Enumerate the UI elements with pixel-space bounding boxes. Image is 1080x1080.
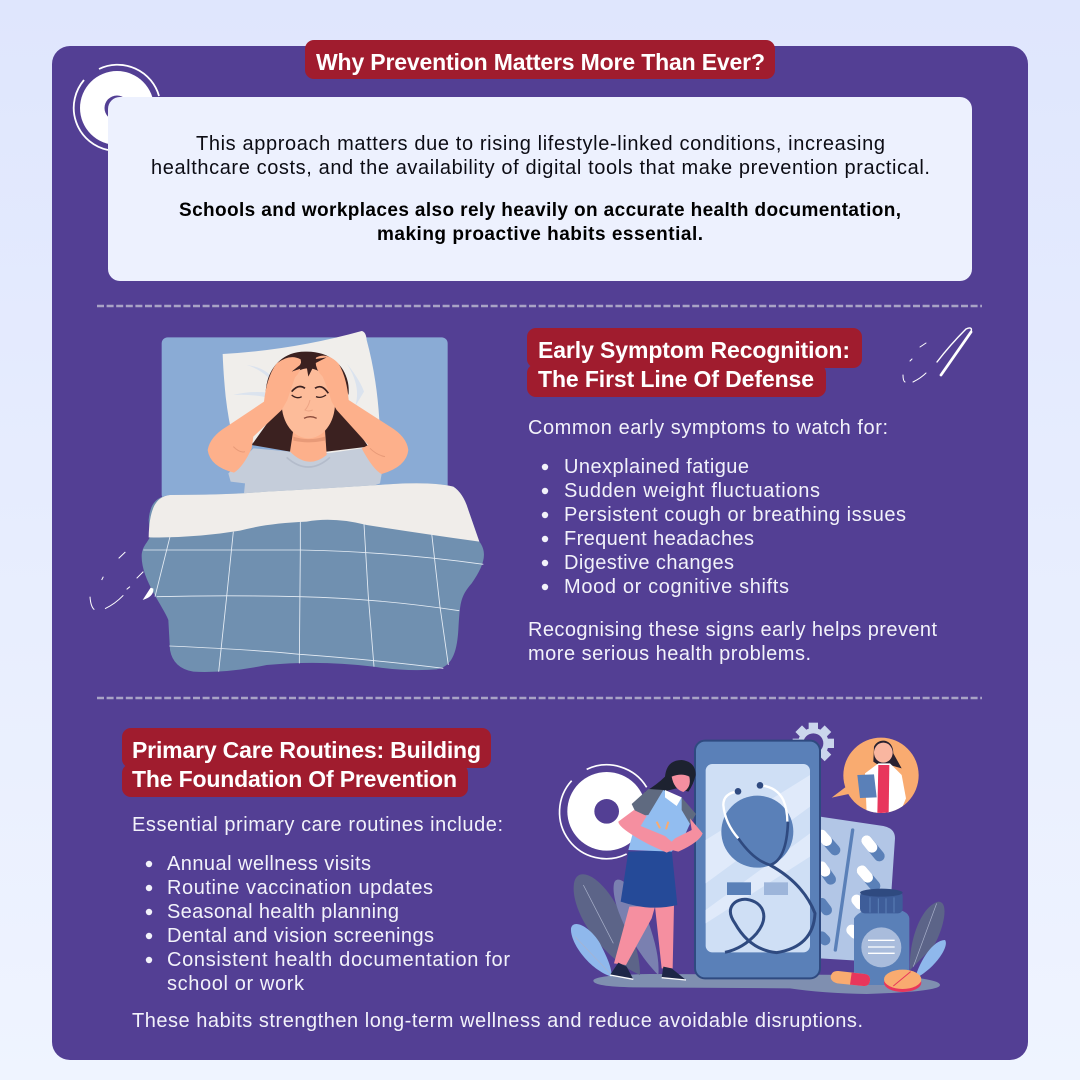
decorative disc icon behind intro card (74, 65, 159, 150)
text block: primary care routines: Annual wellness visits (167, 853, 371, 875)
intro card (108, 97, 972, 281)
text block: primary care routines: Dental and vision screenings (167, 925, 434, 947)
text block: early symptoms (528, 417, 937, 665)
intro card: This approach matters due to rising lifestyle-linked conditions, increasing (196, 133, 885, 155)
text block: primary care routines: These habits strengthen long-term wellness and reduce avoidable disruptions. (132, 1010, 863, 1032)
text block: primary care routines: school or work (167, 973, 305, 995)
heading: primary care routines: The Foundation Of Prevention (132, 766, 457, 792)
heading: primary care routines (122, 728, 491, 797)
illustration: woman with headache in bed (90, 331, 484, 672)
text block: primary care routines (132, 814, 863, 1032)
text block: early symptoms: Sudden weight fluctuations (564, 480, 820, 502)
heading: early symptom recognition: The First Line Of Defense (538, 366, 814, 392)
text block: primary care routines: Essential primary care routines include: (132, 814, 503, 836)
text block: primary care routines: Consistent health documentation for (167, 949, 510, 971)
speech bubble doctor (832, 738, 919, 817)
text block: early symptoms: more serious health problems. (528, 643, 811, 665)
intro card: Schools and workplaces also rely heavily on accurate health documentation, (179, 200, 901, 221)
gear (793, 723, 834, 764)
patient (610, 760, 703, 980)
leaves (571, 874, 946, 978)
heading: early symptom recognition (527, 328, 862, 397)
title: Why Prevention Matters More Than Ever? (316, 49, 765, 75)
decorative scribble top right (903, 328, 971, 382)
intro card: making proactive habits essential. (377, 224, 703, 245)
text block: early symptoms: Common early symptoms to watch for: (528, 417, 888, 439)
illustration: patient and digital doctor (560, 723, 946, 994)
disc (560, 765, 647, 859)
text block: early symptoms: Mood or cognitive shifts (564, 576, 789, 598)
heading: early symptom recognition: Early Symptom Recognition: (538, 337, 850, 363)
text block: early symptoms: Digestive changes (564, 552, 734, 574)
pill bottle (854, 889, 909, 985)
text block: primary care routines: Routine vaccination updates (167, 877, 433, 899)
heading: primary care routines: Primary Care Routines: Building (132, 737, 481, 763)
phone (695, 741, 820, 978)
capsule and tablet (831, 970, 921, 992)
blister pack (820, 817, 895, 962)
text block: early symptoms: Persistent cough or breathing issues (564, 504, 906, 526)
title (305, 40, 775, 79)
ground shadow (593, 974, 940, 994)
text block: primary care routines: Seasonal health planning (167, 901, 399, 923)
text block: early symptoms: Frequent headaches (564, 528, 754, 550)
text block: early symptoms: Recognising these signs early helps prevent (528, 619, 937, 641)
intro card: healthcare costs, and the availability of digital tools that make prevention practical. (151, 157, 930, 179)
text block: early symptoms: Unexplained fatigue (564, 456, 749, 478)
